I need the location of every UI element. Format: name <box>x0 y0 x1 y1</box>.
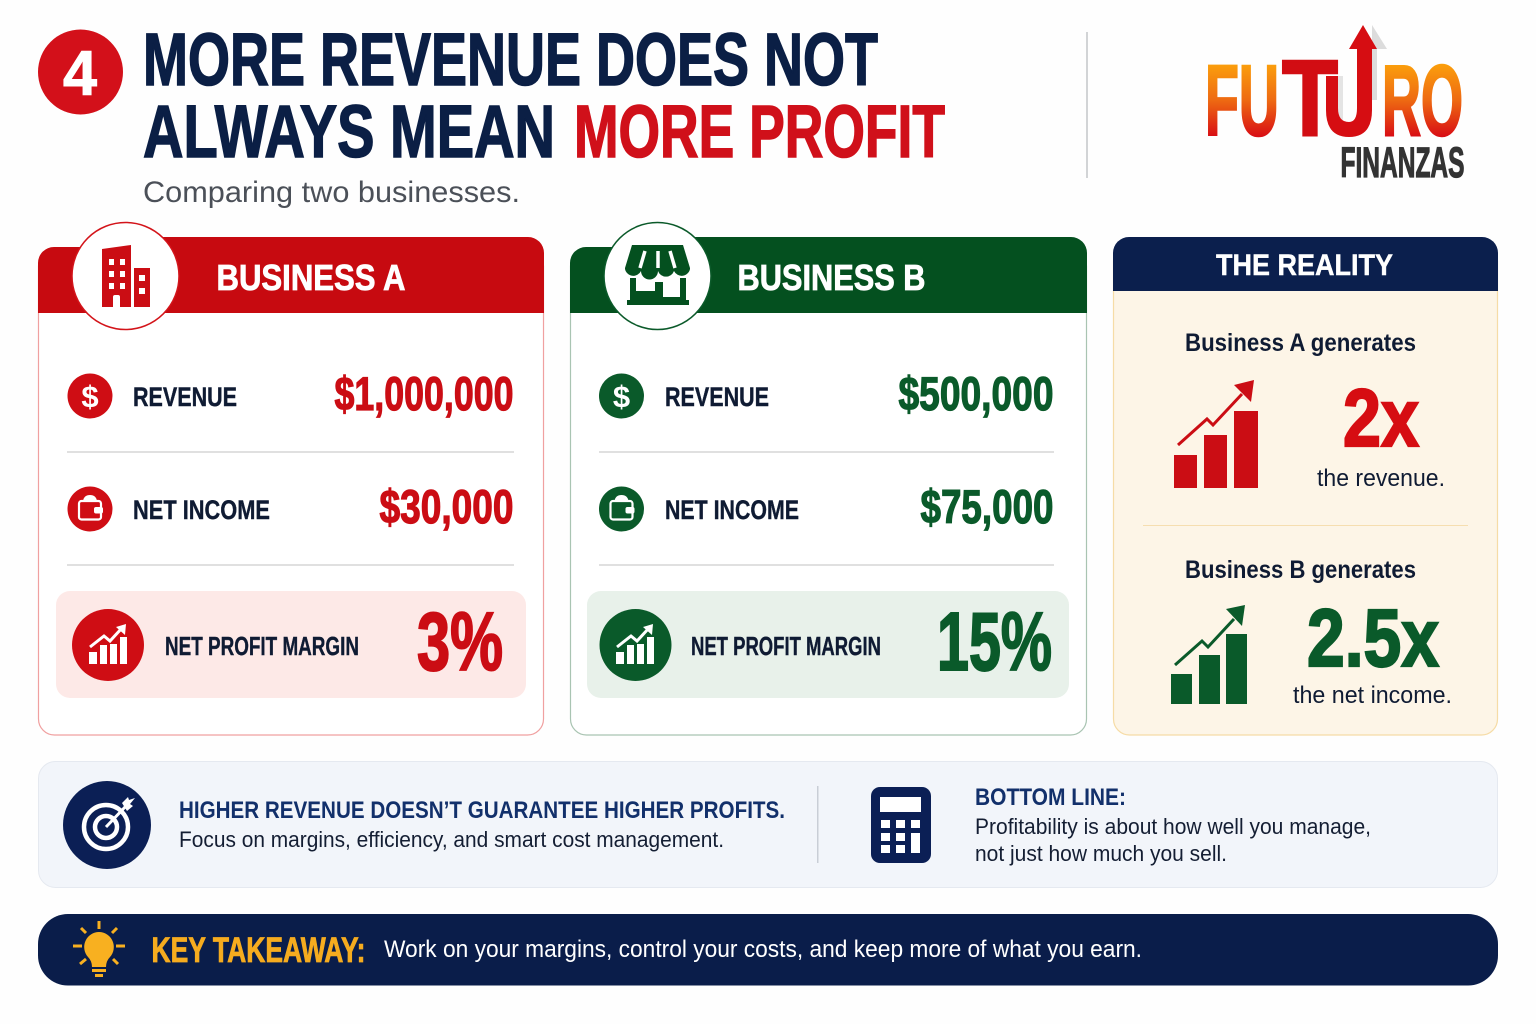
text: higher revenue: Focus on margins, efficiency, and smart cost management. <box>179 827 724 852</box>
panel: business A <box>38 222 544 735</box>
stat: 2x: 2x <box>1343 373 1419 464</box>
revenue row B: $ <box>613 379 630 414</box>
text: key takeaway message: Work on your margins, control your costs, and keep more of what you earn. <box>384 936 1142 963</box>
revenue row A <box>68 367 514 420</box>
text: bottom line: not just how much you sell. <box>975 841 1227 866</box>
text: bottom line: BOTTOM LINE: <box>975 784 1126 811</box>
icon: storefront <box>604 222 711 330</box>
panel: the reality <box>1113 237 1498 735</box>
chart icon: green bars <box>1171 605 1247 704</box>
heading: the reality: THE REALITY <box>1216 249 1393 282</box>
icon: calculator <box>871 787 931 863</box>
net income row B: $75,000 <box>920 480 1054 533</box>
icon: light bulb <box>73 921 125 977</box>
net profit margin row B: 15% <box>937 595 1052 688</box>
text: bottom line <box>975 784 1371 866</box>
net profit margin row A: NET PROFIT MARGIN <box>165 631 359 661</box>
logo: Futuro Finanzas: FU <box>1205 45 1279 157</box>
net income row B: NET INCOME <box>665 495 799 525</box>
text: business B generates: Business B generates <box>1185 556 1416 584</box>
text: business A generates: Business A generates <box>1185 329 1416 357</box>
number badge: 4 <box>63 39 97 109</box>
number badge <box>38 30 123 114</box>
panel: business B <box>570 222 1087 735</box>
icon: target <box>63 781 151 869</box>
net profit margin row B: NET PROFIT MARGIN <box>691 631 881 661</box>
revenue row B: REVENUE <box>665 382 769 412</box>
logo: Futuro Finanzas <box>1205 25 1464 187</box>
header: the reality <box>1113 237 1498 291</box>
heading: business A: BUSINESS A <box>216 257 406 298</box>
title: ALWAYS MEAN <box>143 90 555 173</box>
net profit margin row A <box>56 591 526 698</box>
revenue row B <box>599 367 1054 420</box>
heading: business B: BUSINESS B <box>738 257 926 298</box>
net profit margin row A: 3% <box>417 595 503 688</box>
title <box>143 18 945 173</box>
text: the revenue: the revenue. <box>1317 465 1445 492</box>
logo: Futuro Finanzas: RO <box>1382 45 1463 157</box>
chart icon: red bars <box>1174 380 1258 488</box>
icon: office building <box>72 222 179 330</box>
logo: Futuro Finanzas: T <box>1282 37 1338 158</box>
text: key takeaway label: KEY TAKEAWAY: <box>152 931 366 970</box>
text: the net income: the net income. <box>1293 682 1452 709</box>
revenue row A: $1,000,000 <box>334 367 514 420</box>
header: business B <box>570 237 1087 313</box>
net income row A <box>68 480 514 533</box>
revenue row B: $500,000 <box>898 367 1054 420</box>
title: MORE PROFIT <box>574 90 945 173</box>
text: bottom line: Profitability is about how well you manage, <box>975 814 1371 839</box>
net income row A: NET INCOME <box>133 495 270 525</box>
panel: insights <box>38 762 1498 888</box>
stat: 2.5x: 2.5x <box>1307 593 1439 684</box>
title: MORE REVENUE DOES NOT <box>143 18 878 101</box>
revenue row A: REVENUE <box>133 382 237 412</box>
header: business A <box>38 237 544 313</box>
banner: key takeaway <box>38 914 1498 986</box>
net income row A: $30,000 <box>380 480 514 533</box>
subtitle: Comparing two businesses. <box>143 176 520 209</box>
net profit margin row B <box>587 591 1069 698</box>
text: higher revenue: HIGHER REVENUE DOESN’T GUARANTEE HIGHER PROFITS. <box>179 797 785 824</box>
text: higher revenue <box>179 797 785 852</box>
net income row B <box>599 480 1054 533</box>
revenue row A: $ <box>81 379 99 414</box>
